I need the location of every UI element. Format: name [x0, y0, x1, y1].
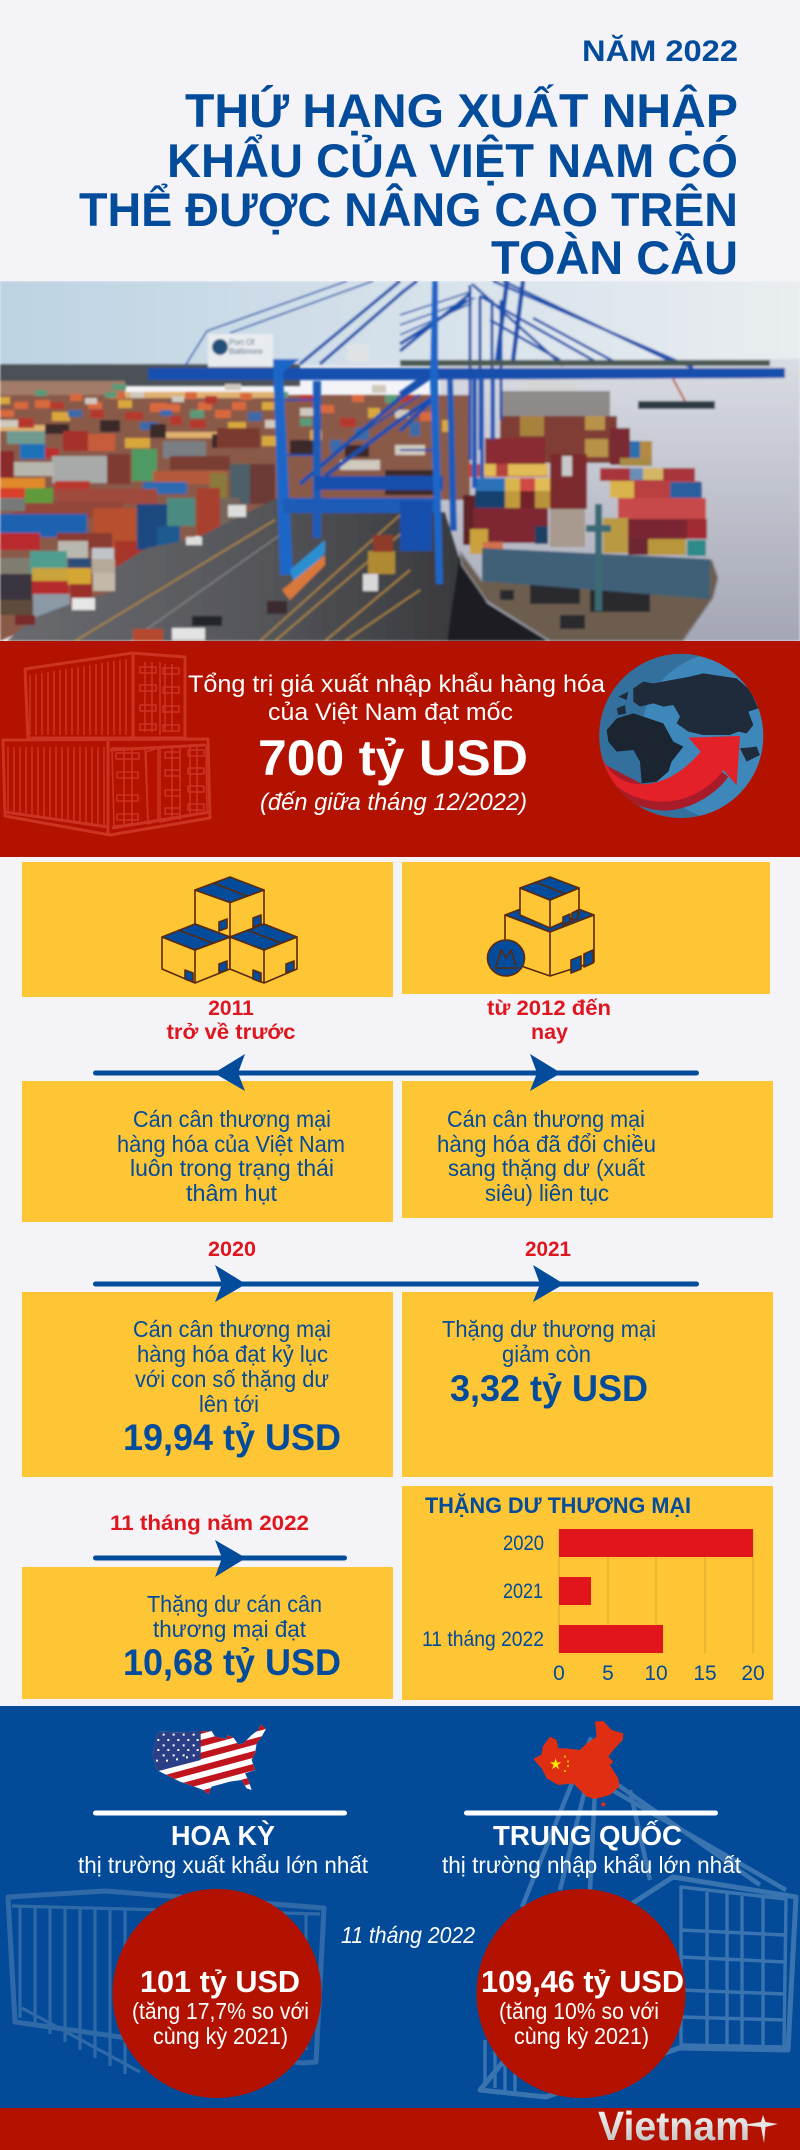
text: Thặng dư cán cân: [147, 1591, 322, 1617]
arrow: timeline 2022: [93, 1540, 347, 1577]
label: 2011 and earlier: trở về trước: [166, 1021, 296, 1044]
label: 2012 to present: [487, 997, 611, 1044]
text: total value: Tổng trị giá xuất nhập khẩu hàng hóa: [188, 671, 606, 698]
chart title: THẶNG DƯ THƯƠNG MẠI: [425, 1493, 691, 1518]
panel: 2021 surplus: [402, 1292, 773, 1477]
value: 19,94 tỷ USD: [123, 1417, 341, 1458]
panel: bar chart trade surplus: [402, 1486, 773, 1700]
text: siêu) liên tục: [485, 1180, 609, 1206]
category labels: 2021: [503, 1580, 543, 1603]
circle: China import value: cùng kỳ 2021): [514, 2023, 649, 2049]
category labels: [422, 1532, 544, 1651]
bar: 11 months 2022: [559, 1625, 663, 1653]
axis labels: 20: [741, 1662, 765, 1685]
label: 2012 to present: nay: [531, 1021, 568, 1044]
text: [442, 1316, 656, 1367]
photo: container port with cranes and cargo ship: [0, 281, 800, 641]
text: [133, 1316, 331, 1417]
text: sang thặng dư (xuất: [448, 1155, 646, 1181]
sign: Port of Baltimore: Port Of: [229, 338, 255, 347]
text: Cán cân thương mại: [447, 1106, 645, 1132]
main heading: KHẨU CỦA VIỆT NAM CÓ: [167, 134, 738, 187]
label: 11 months 2022: 11 tháng năm 2022: [110, 1512, 309, 1535]
column header: China: [442, 1810, 742, 1878]
main heading: THỂ ĐƯỢC NÂNG CAO TRÊN: [79, 183, 738, 236]
panel: trade deficit before 2011: [22, 1081, 393, 1222]
label: 2011 and earlier: 2011: [208, 997, 254, 1020]
text: hàng hóa đạt kỷ lục: [137, 1341, 328, 1367]
panel: 2011 and earlier icon: [22, 862, 393, 997]
period label: 11 tháng 2022: [341, 1922, 475, 1948]
text: total value: [188, 671, 606, 816]
text: hàng hóa của Việt Nam: [117, 1131, 345, 1157]
value: 3,32 tỷ USD: [450, 1368, 648, 1409]
text: [117, 1106, 345, 1206]
icon: two boxes with label: [488, 877, 594, 976]
panel: 2012 to present icon: [402, 862, 770, 994]
main heading: THỨ HẠNG XUẤT NHẬP: [185, 84, 738, 137]
icon: stacked containers watermark: [3, 653, 210, 835]
arrow: timeline 2011 to 2012: [93, 1054, 699, 1091]
label: 2020: 2020: [208, 1238, 256, 1261]
text: hàng hóa đã đổi chiều: [437, 1131, 656, 1157]
label: 2012 to present: từ 2012 đến: [487, 997, 611, 1020]
kicker: year: NĂM 2022: [582, 34, 738, 68]
illustration: right hanging container watermark: [480, 1738, 796, 2097]
circle: USA export value: cùng kỳ 2021): [153, 2023, 288, 2049]
panel: 2020 surplus: [22, 1292, 393, 1477]
icon: three boxes: [162, 877, 297, 983]
circle: China import value: (tăng 10% so với: [499, 1998, 659, 2024]
circle: USA export value: [112, 1889, 322, 2098]
illustration: left container watermark: [8, 1891, 324, 2074]
band: total trade value: [0, 641, 800, 857]
axis labels: 5: [602, 1662, 614, 1685]
bar: 2021: [559, 1577, 591, 1605]
text: total value: 700 tỷ USD: [258, 730, 528, 786]
icon: USA flag map: [152, 1724, 266, 1794]
main heading: [79, 84, 738, 284]
value: 10,68 tỷ USD: [123, 1642, 341, 1683]
text: total value: của Việt Nam đạt mốc: [268, 699, 513, 726]
column header: USA: thị trường xuất khẩu lớn nhất: [78, 1852, 369, 1878]
category labels: 11 tháng 2022: [422, 1628, 544, 1651]
text: thâm hụt: [186, 1180, 278, 1206]
sign: Port of Baltimore: Baltimore: [229, 347, 263, 356]
category labels: 2020: [503, 1532, 544, 1555]
text: total value: (đến giữa tháng 12/2022): [260, 789, 527, 816]
text: lên tới: [199, 1391, 259, 1417]
text: [437, 1106, 656, 1206]
icon: China flag map: [533, 1721, 623, 1806]
axis labels: 0: [553, 1662, 565, 1685]
axis labels: [553, 1662, 765, 1685]
sign: Port of Baltimore: [208, 334, 273, 367]
title block: [79, 34, 738, 284]
circle: China import value: [476, 1889, 686, 2098]
band: largest markets: [0, 1706, 800, 2108]
panel: 11 months 2022 surplus: [22, 1567, 393, 1699]
circle: USA export value: (tăng 17,7% so với: [132, 1998, 309, 2024]
text: Cán cân thương mại: [133, 1106, 331, 1132]
axis labels: 15: [693, 1662, 717, 1685]
icon: globe with rising red arrow: [599, 654, 763, 818]
text: luôn trong trạng thái: [130, 1155, 334, 1181]
text: giảm còn: [502, 1341, 591, 1367]
text: với con số thặng dư: [135, 1366, 329, 1392]
column header: China: TRUNG QUỐC: [493, 1819, 682, 1851]
bar: 2020: [559, 1529, 753, 1557]
text: thương mại đạt: [153, 1616, 307, 1642]
text: [147, 1591, 322, 1642]
column header: China: thị trường nhập khẩu lớn nhất: [442, 1852, 742, 1878]
text: Cán cân thương mại: [133, 1316, 331, 1342]
label: 2011 and earlier: [166, 997, 296, 1044]
column header: USA: HOA KỲ: [171, 1820, 275, 1851]
circle: USA export value: 101 tỷ USD: [140, 1964, 300, 1999]
column header: USA: [78, 1810, 369, 1878]
logo: Vietnam+: Vietnam: [598, 2103, 750, 2149]
footer band: [0, 2103, 800, 2150]
main heading: TOÀN CẦU: [491, 231, 738, 284]
circle: China import value: 109,46 tỷ USD: [481, 1964, 684, 1999]
label: 2021: 2021: [525, 1238, 571, 1261]
arrow: timeline 2020 to 2021: [93, 1265, 699, 1302]
text: Thặng dư thương mại: [442, 1316, 656, 1342]
panel: trade surplus from 2012: [402, 1081, 773, 1218]
axis labels: 10: [644, 1662, 668, 1685]
